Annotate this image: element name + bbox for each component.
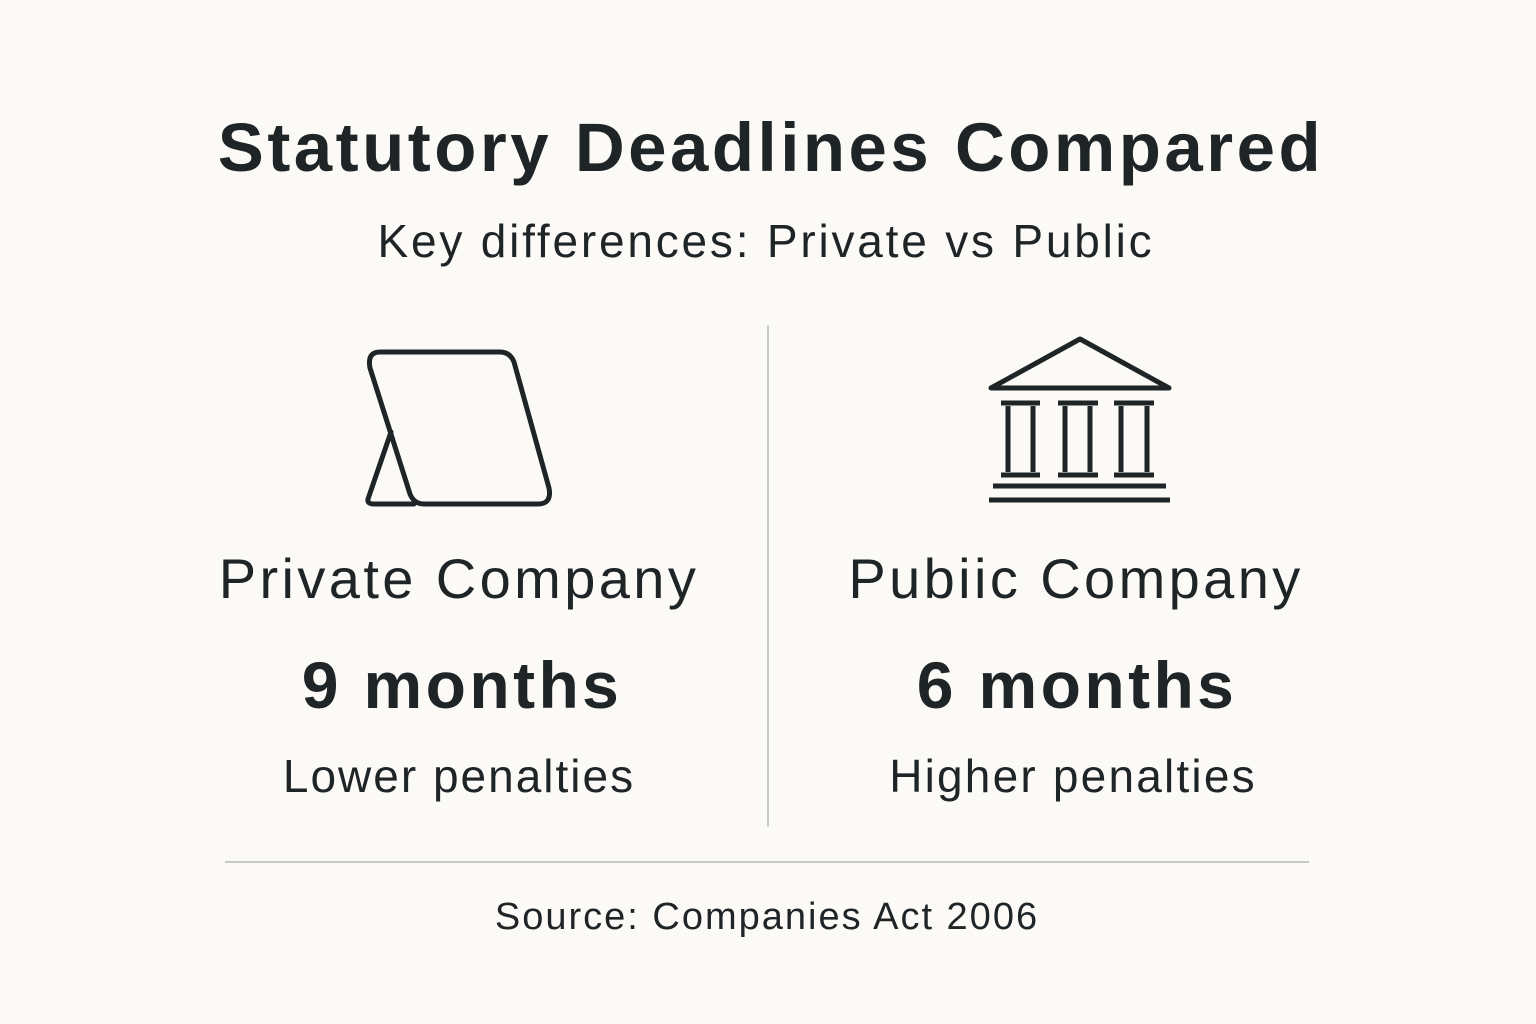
- source note: Source: Companies Act 2006: [495, 896, 1039, 938]
- subtitle: Key differences: Private vs Public: [377, 215, 1154, 267]
- title: Statutory Deadlines Compared: [218, 109, 1324, 186]
- penalty text: Higher penalties: [889, 750, 1257, 802]
- label: Pubiic Company: Pubiic Company: [848, 547, 1304, 610]
- icon: bank building: [988, 336, 1172, 502]
- penalty text: Lower penalties: [283, 750, 635, 802]
- label: Private Company: Private Company: [219, 547, 699, 610]
- panel: public company: [848, 336, 1304, 802]
- deadline: 6 months: 6 months: [917, 648, 1237, 722]
- horizontal divider: [225, 861, 1309, 863]
- deadline: 9 months: 9 months: [302, 648, 622, 722]
- icon: tablet: [365, 350, 552, 506]
- panel: private company: [219, 350, 699, 802]
- vertical divider: [767, 325, 769, 827]
